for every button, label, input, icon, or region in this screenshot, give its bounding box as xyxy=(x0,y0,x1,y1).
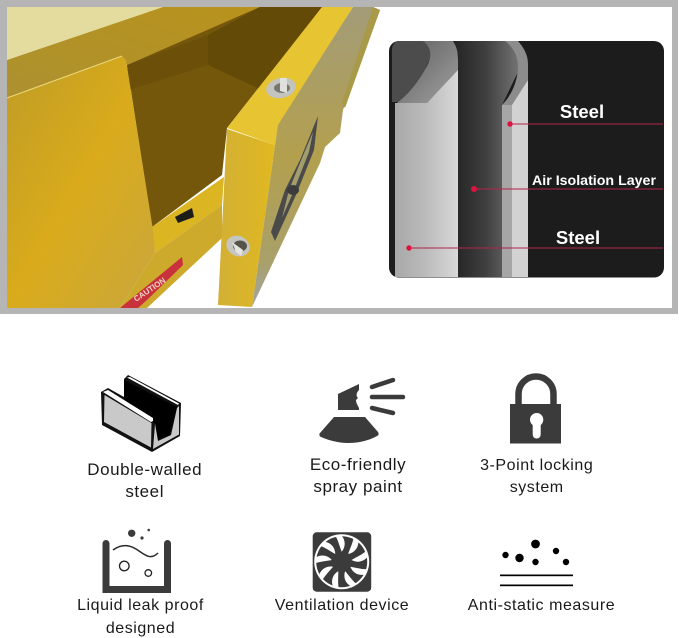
label: air isolation layer: Air Isolation Layer xyxy=(532,172,657,188)
caution label xyxy=(120,257,183,308)
door handle xyxy=(271,116,318,241)
icon: double wall channel xyxy=(101,375,181,452)
feature: liquid leak proof designed xyxy=(77,529,204,637)
label: designed xyxy=(106,620,175,637)
icon: padlock xyxy=(510,376,561,444)
feature: eco-friendly spray paint xyxy=(310,380,406,496)
label: Double-walled xyxy=(87,460,202,479)
label: Ventilation device xyxy=(275,597,409,614)
callout lines xyxy=(409,124,663,248)
air gap xyxy=(453,41,518,277)
panel: wall cross-section xyxy=(389,41,664,278)
feature: anti-static measure xyxy=(468,540,615,614)
latch slot xyxy=(175,208,194,223)
label: steel xyxy=(125,482,164,501)
label: system xyxy=(510,479,564,496)
icon: particles over lines xyxy=(500,540,573,586)
label: 3-Point locking xyxy=(480,457,593,474)
inner steel sheet xyxy=(502,41,528,277)
icon: spray nozzle xyxy=(319,380,403,443)
caution label: CAUTION xyxy=(132,276,168,304)
label: steel bottom: Steel xyxy=(556,227,600,248)
lock top xyxy=(264,75,298,101)
label: Liquid leak proof xyxy=(77,597,204,614)
feature: double-walled steel xyxy=(87,375,202,501)
icon: fan xyxy=(313,532,371,592)
photo frame xyxy=(0,0,678,314)
callout dots xyxy=(406,121,513,251)
label: steel top: Steel xyxy=(560,101,604,122)
feature: 3-point locking system xyxy=(480,376,593,496)
outer steel sheet xyxy=(392,41,458,277)
label: spray paint xyxy=(313,477,403,496)
label: Eco-friendly xyxy=(310,455,406,474)
lock bottom xyxy=(223,232,253,260)
photo: open yellow cabinet xyxy=(7,7,380,308)
feature: ventilation device xyxy=(275,532,409,614)
icon: leak-proof tray xyxy=(106,529,168,590)
label: Anti-static measure xyxy=(468,597,615,614)
